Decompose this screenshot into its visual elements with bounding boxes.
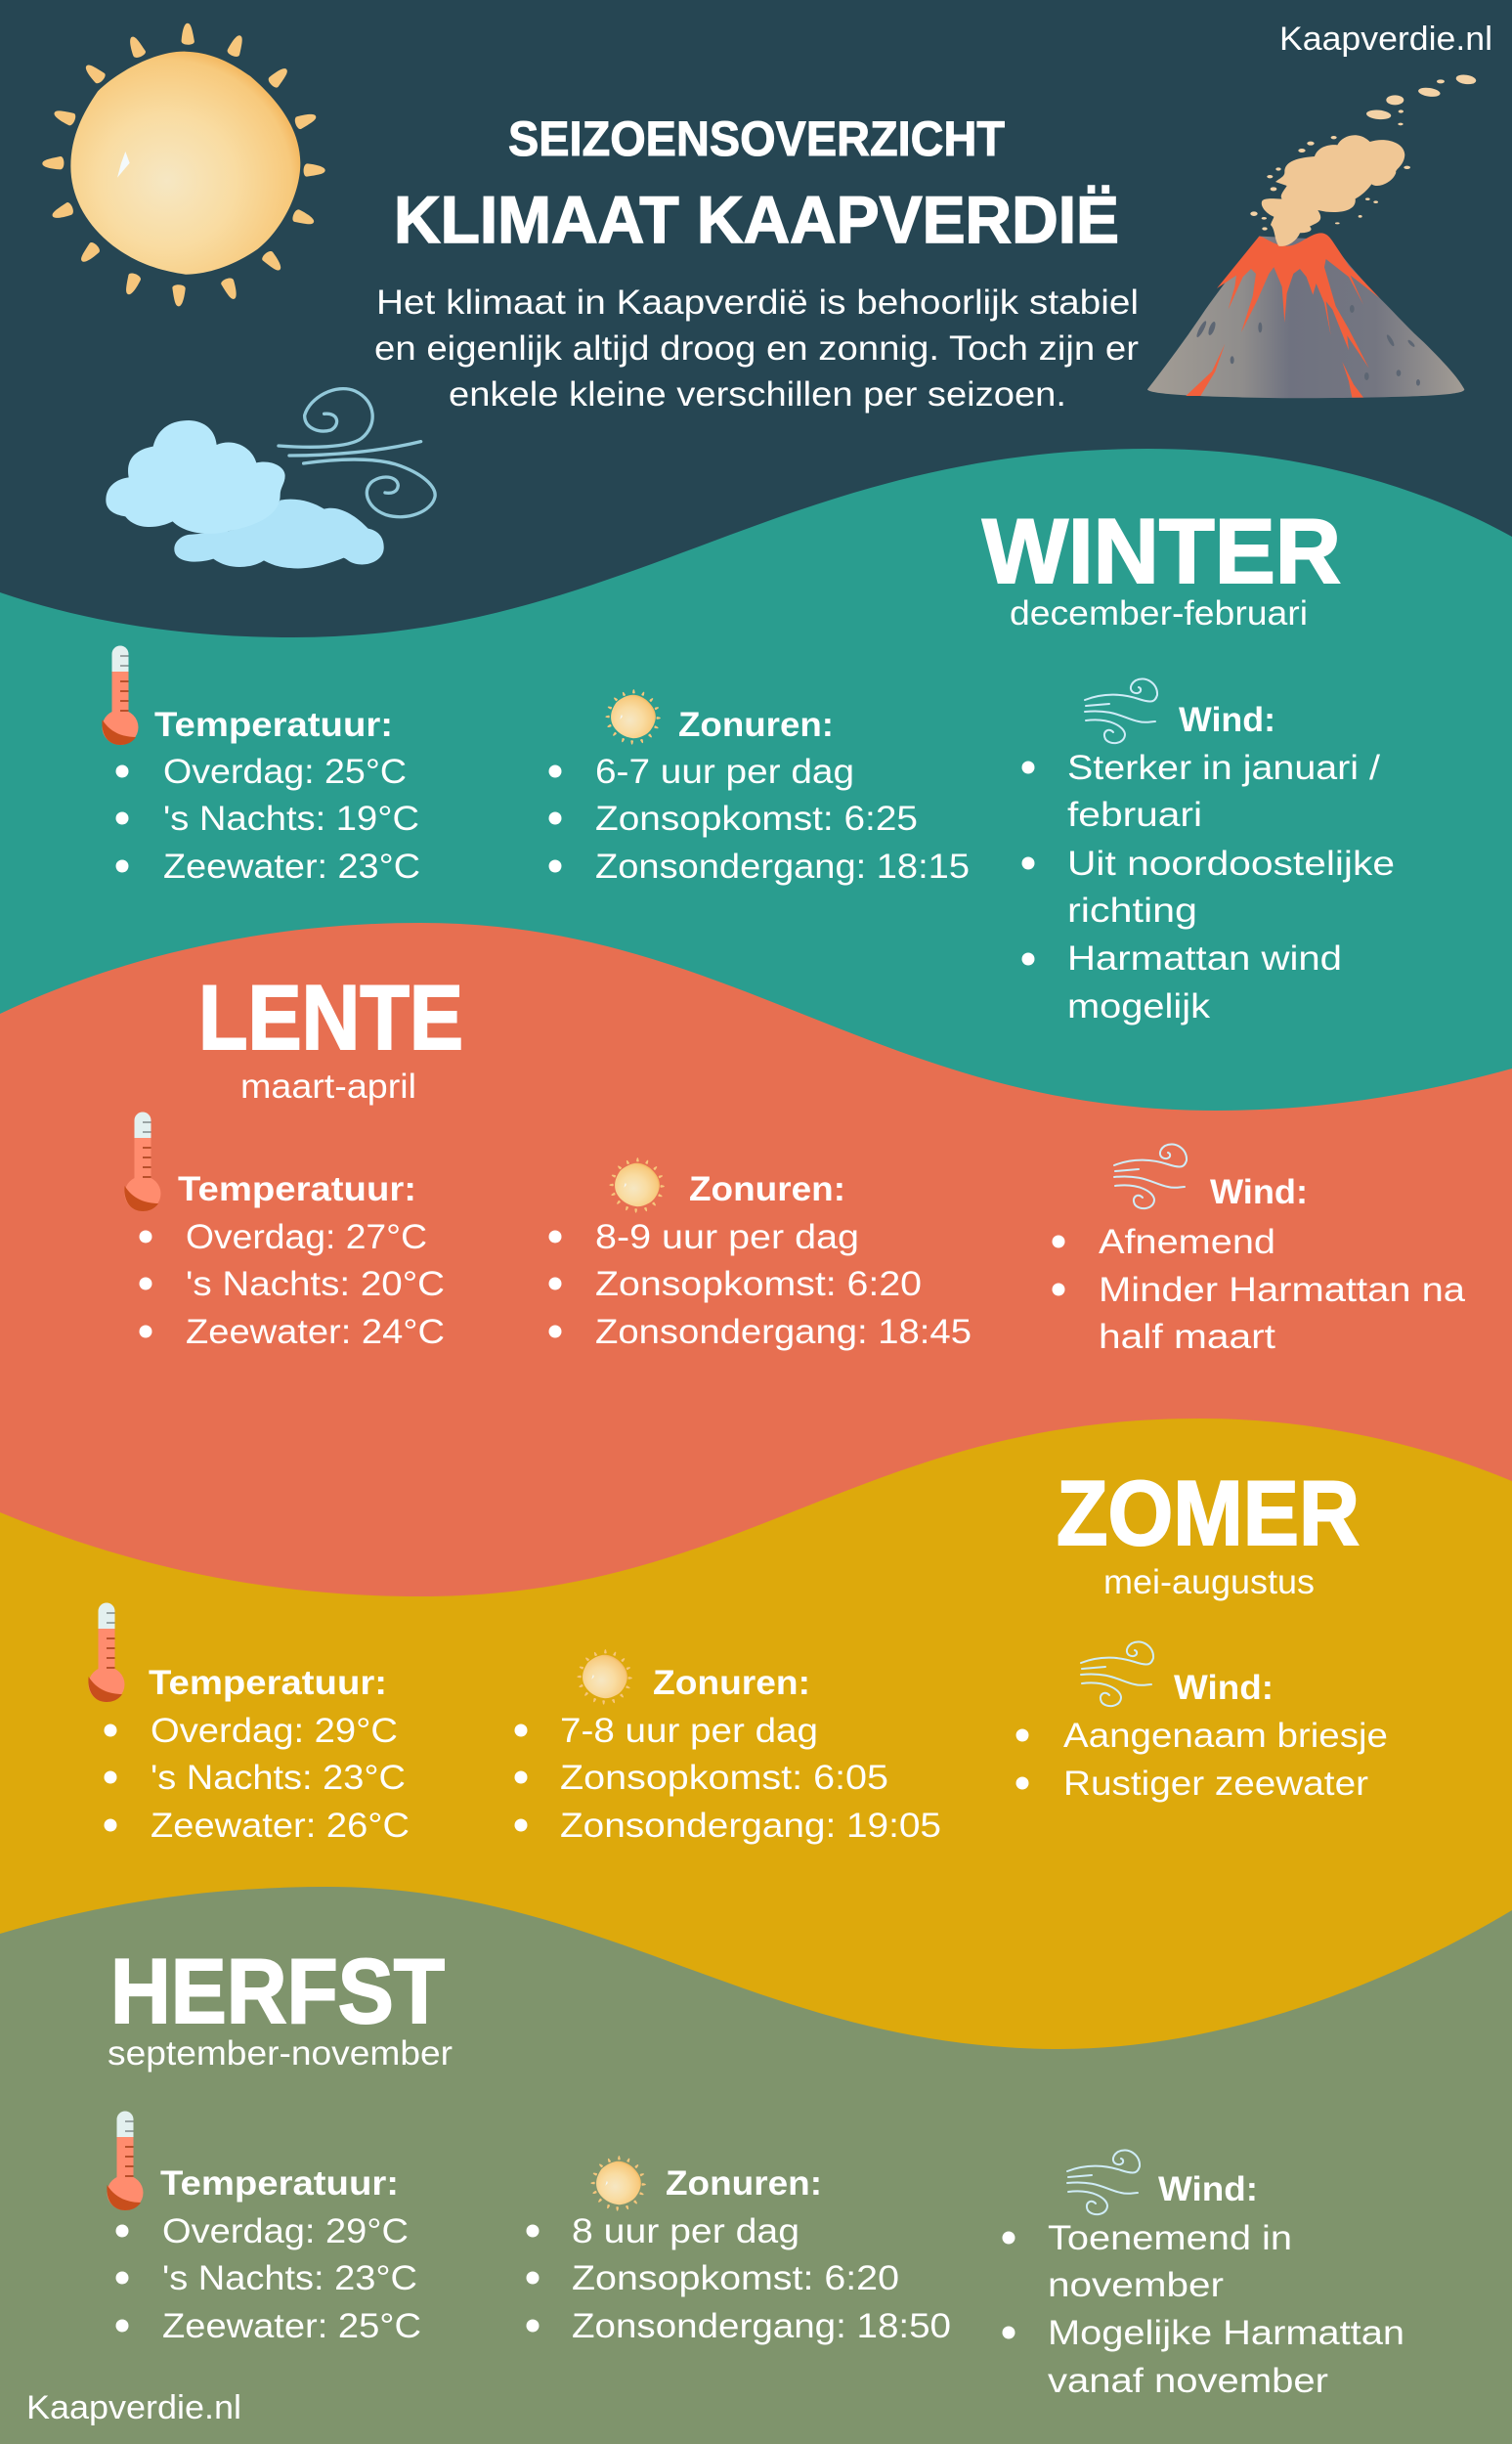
column: wind: vanaf november (1048, 2362, 1328, 2400)
wave: lente band (0, 923, 1512, 2444)
column: temperatuur: Zeewater: 24°C (186, 1313, 445, 1351)
column: zonuren (514, 1649, 941, 1845)
intro text: enkele kleine verschillen per seizoen. (449, 375, 1066, 414)
brand label top: Kaapverdie.nl (1279, 21, 1492, 58)
column: zonuren: 8 uur per dag (572, 2212, 799, 2250)
column: wind: half maart (1099, 1318, 1275, 1356)
subtitle: winter months: december-februari (1010, 594, 1308, 633)
column: wind: Toenemend in (1048, 2219, 1292, 2257)
column: wind: Uit noordoostelijke (1067, 845, 1395, 883)
icon: wind (1114, 1144, 1187, 1208)
column: temperatuur: Temperatuur: (160, 2164, 399, 2203)
heading: herfst: HERFST (110, 1940, 445, 2042)
column: wind: Afnemend (1099, 1223, 1275, 1261)
icon: thermometer (124, 1113, 160, 1211)
column: zonuren: Zonuren: (678, 706, 834, 744)
column: zonuren (526, 2156, 951, 2345)
volcano plume (1262, 135, 1404, 246)
icon: thermometer (107, 2112, 143, 2210)
intro text: Het klimaat in Kaapverdië is behoorlijk stabiel (376, 284, 1139, 322)
column: temperatuur: Zeewater: 25°C (162, 2307, 421, 2345)
subtitle: herfst months: september-november (108, 2034, 453, 2073)
icon: large sun (42, 23, 325, 307)
column: wind (1052, 1144, 1466, 1356)
icon: small sun (577, 1649, 632, 1705)
icon: small sun (590, 2156, 646, 2211)
column: temperatuur: 's Nachts: 23°C (162, 2259, 417, 2297)
column: zonuren: Zonsondergang: 19:05 (560, 1807, 941, 1845)
column: wind: richting (1067, 892, 1197, 930)
column: wind: Aangenaam briesje (1063, 1717, 1388, 1755)
heading: klimaat kaapverdie: KLIMAAT KAAPVERDIË (394, 183, 1119, 257)
column: wind: Mogelijke Harmattan (1048, 2314, 1404, 2352)
column: temperatuur: Temperatuur: (154, 706, 393, 744)
column: temperatuur: 's Nachts: 23°C (151, 1759, 406, 1797)
column: wind: Wind: (1179, 701, 1275, 739)
column: wind: Sterker in januari / (1067, 749, 1380, 787)
icon: clouds and wind (106, 389, 435, 568)
column: temperatuur: 's Nachts: 19°C (163, 800, 419, 838)
column: zonuren: Zonsopkomst: 6:25 (595, 800, 918, 838)
wave: herfst band (0, 1887, 1512, 2444)
icon: small sun (609, 1157, 665, 1213)
column: temperatuur: Overdag: 27°C (186, 1218, 427, 1256)
column: zonuren: Zonsondergang: 18:15 (595, 848, 970, 886)
heading: winter: WINTER (982, 500, 1341, 602)
column: wind (1016, 1641, 1388, 1803)
heading: seizoensoverzicht: SEIZOENSOVERZICHT (508, 111, 1005, 166)
title block (374, 111, 1139, 414)
column: temperatuur: Temperatuur: (178, 1170, 416, 1208)
subtitle: lente months: maart-april (240, 1068, 416, 1106)
column: temperatuur: Overdag: 25°C (163, 753, 407, 791)
column: zonuren: Zonsopkomst: 6:05 (560, 1759, 888, 1797)
icon: wind (1085, 678, 1157, 743)
icon: wind (1081, 1641, 1153, 1706)
heading: zomer: ZOMER (1057, 1462, 1360, 1564)
panel: winter (102, 500, 1395, 1026)
column: temperatuur: Temperatuur: (149, 1664, 387, 1702)
column: wind: Harmattan wind (1067, 939, 1342, 978)
column: zonuren: 7-8 uur per dag (560, 1712, 818, 1750)
column: temperatuur (124, 1113, 445, 1351)
column: zonuren (549, 1157, 972, 1351)
column: temperatuur (102, 645, 420, 886)
column: wind (1003, 2150, 1404, 2400)
column: wind: februari (1067, 796, 1202, 834)
column: temperatuur: Zeewater: 26°C (151, 1807, 410, 1845)
column: temperatuur: Overdag: 29°C (151, 1712, 398, 1750)
panel: herfst (107, 1940, 1404, 2400)
column: temperatuur (88, 1603, 410, 1845)
icon: thermometer (102, 645, 139, 745)
column: wind (1022, 678, 1395, 1026)
column: zonuren: 6-7 uur per dag (595, 753, 854, 791)
icon: volcano (1147, 73, 1477, 398)
column: wind: Wind: (1210, 1173, 1308, 1211)
column: zonuren: Zonsopkomst: 6:20 (572, 2259, 899, 2297)
icon: thermometer (88, 1603, 125, 1702)
column: wind: Rustiger zeewater (1063, 1765, 1368, 1803)
column: zonuren: Zonsondergang: 18:50 (572, 2307, 951, 2345)
column: temperatuur (107, 2112, 421, 2345)
panel: lente (124, 966, 1466, 1356)
column: temperatuur: 's Nachts: 20°C (186, 1265, 445, 1303)
brand label bottom: Kaapverdie.nl (26, 2389, 241, 2426)
intro text (374, 284, 1139, 414)
subtitle: zomer months: mei-augustus (1103, 1563, 1315, 1601)
icon: wind (1067, 2150, 1140, 2214)
column: zonuren: 8-9 uur per dag (595, 1218, 859, 1256)
column: temperatuur: Overdag: 29°C (162, 2212, 409, 2250)
column: wind: mogelijk (1067, 987, 1211, 1026)
column: zonuren: Zonsopkomst: 6:20 (595, 1265, 922, 1303)
heading: lente: LENTE (198, 966, 463, 1069)
column: zonuren: Zonuren: (666, 2164, 822, 2203)
wave: zomer band (0, 1418, 1512, 2444)
panel: zomer (88, 1462, 1388, 1845)
column: zonuren: Zonsondergang: 18:45 (595, 1313, 972, 1351)
intro text: en eigenlijk altijd droog en zonnig. Toch zijn er (374, 329, 1139, 368)
column: zonuren: Zonuren: (653, 1664, 810, 1702)
column: temperatuur: Zeewater: 23°C (163, 848, 420, 886)
column: wind: Wind: (1174, 1669, 1274, 1707)
column: wind: Wind: (1158, 2170, 1258, 2208)
column: wind: Minder Harmattan na (1099, 1271, 1466, 1309)
icon: small sun (605, 689, 661, 745)
column: zonuren: Zonuren: (689, 1170, 845, 1208)
column: wind: november (1048, 2266, 1224, 2304)
column: zonuren (549, 689, 970, 886)
